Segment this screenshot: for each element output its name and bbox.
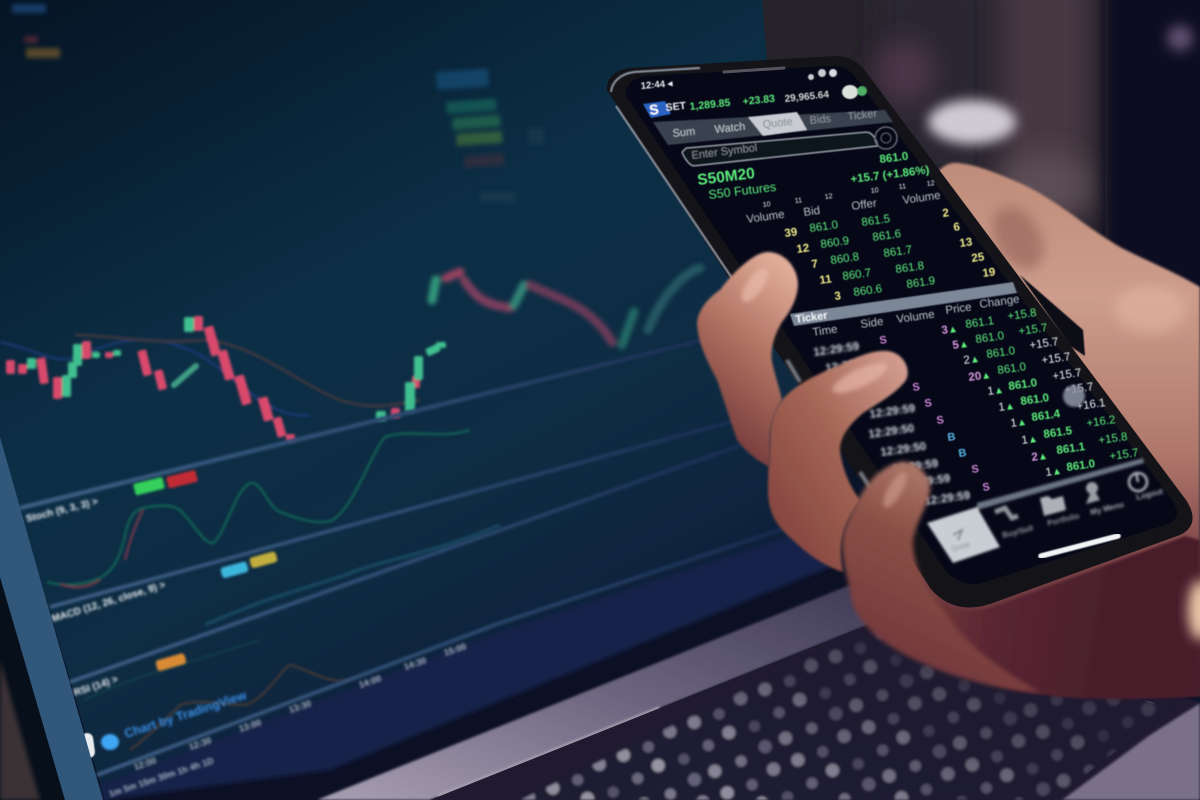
bottom navigation: Portfolio [1046,511,1080,528]
monitor left bezel strip [0,437,103,800]
hinge strip [317,585,885,800]
ticker side markers: S [879,334,888,347]
ticker header strip: Volume [896,309,935,326]
gap between phone and palm [1020,275,1085,356]
ticker rows: 861.5 [1043,425,1074,441]
time axis labels: 12:00 [133,755,158,772]
bright palm edge at right [1188,580,1200,640]
ticker header strip: Change [979,293,1020,311]
ticker rows: 1▲ [1021,433,1039,447]
tab bar: Sum [672,126,696,140]
ticker rows: 861.0 [997,361,1027,377]
order book table: 860.9 [820,235,850,251]
time axis labels: 13:30 [288,698,313,715]
phone side buttons [787,360,878,500]
quote header: 12 [824,193,833,201]
ticker rows: 861.0 [975,330,1005,346]
ticker side markers [879,334,991,494]
ticker rows: +16.1 [1076,397,1106,413]
time axis labels: 13:00 [238,717,263,734]
thumb crease and shading [982,198,1186,563]
time axis labels: 15:00 [443,641,468,658]
ticker rows: +15.7 [1041,351,1071,367]
ticker rows: 861.0 [986,345,1016,361]
candlestick chart far right, out of focus [432,268,700,345]
index ticker bar: SET [665,100,687,114]
bottom navigation: Quote [951,542,971,553]
fingertip highlights [737,264,911,511]
finger: lower [842,462,1040,692]
order book table: 860.8 [830,251,860,267]
order book table: 861.5 [861,213,891,229]
palm rest [1062,703,1200,800]
time axis labels: 1m 5m 15m 30m 1h 4h 1D [108,755,215,799]
ticker rows: +16.2 [1086,414,1116,430]
speaker notch [724,68,784,72]
ticker rows: +15.7 [1052,367,1082,383]
order book table: 12 [796,242,810,256]
ticker header strip: Ticker [795,310,829,326]
ticker rows: 861.1 [1056,441,1087,457]
tab bar: Quote [762,116,793,131]
quote header [696,151,935,209]
ticker times: 12:29:59 [813,341,860,359]
quote header: S50M20 [696,165,756,189]
thumb, palm and wrist behind the phone [900,163,1200,697]
ticker rows: 861.1 [965,315,995,331]
index ticker bar: 1,289.85 [689,97,731,113]
bottom navigation: Logout [1135,487,1164,502]
smartphone [607,56,1193,607]
order book table: 3 [834,290,842,303]
ticker rows: +15.7 [1029,336,1059,352]
order book table: 861.7 [883,244,913,260]
order book table: 861.0 [809,219,839,235]
tab bar: Bids [809,113,832,127]
ticker rows: 5▲ [952,338,970,352]
bottom navigation: My Menu [1089,500,1125,517]
order book table: 13 [959,236,973,250]
tab bar [653,108,893,145]
order book table: Bid [803,205,821,219]
order book table: Offer [851,198,878,213]
ticker times: 12:29:59 [892,458,939,476]
candles group 1 [6,316,420,442]
moving average lines [0,335,420,415]
skin below phone [925,536,1200,699]
tab bar: Watch [714,121,746,136]
order book table: 860.7 [842,267,872,283]
time axis labels: 14:00 [358,673,383,690]
ticker side markers: B [947,431,956,444]
chart labels and pills [25,470,278,750]
ticker rows: 1▲ [998,400,1016,414]
symbol search field [682,127,897,166]
ticker side markers: S [898,366,907,379]
finger: index [697,252,798,467]
status bar: 12:44 ◂ [640,78,674,92]
chart labels and pills: RSI (14) > [73,674,120,699]
ticker times: 12:29:50 [880,441,927,459]
chart labels and pills: MACD (12, 26, close, 9) > [51,580,167,625]
ticker rows: 861.4 [1031,408,1062,424]
ticker rows: 861.0 [1008,377,1038,393]
index ticker bar: S [648,101,660,118]
time axis labels: 14:30 [403,655,428,672]
order book table: 2 [942,207,950,220]
ticker rows: 1▲ [1010,416,1028,430]
quote header: 10 [870,187,879,195]
pane divider lines [20,336,810,775]
ticker side markers: S [924,397,933,410]
ticker rows [941,307,1139,479]
quote header: 12 [926,180,935,188]
order book table: 861.8 [895,260,925,276]
ticker header strip: Side [860,316,884,331]
tab bar: Ticker [847,108,878,123]
order book table: 19 [982,266,996,280]
ticker side markers: S [982,481,991,494]
ticker rows: 3▲ [941,323,959,337]
index ticker bar: +23.83 [742,93,776,108]
ticker rows: 1▲ [987,384,1005,398]
ticker side markers: S [912,381,921,394]
ticker times: 12:29:59 [825,357,872,375]
ticker rows: 2▲ [963,353,981,367]
white scrollbar pill [80,732,96,759]
ticker rows: +15.7 [1109,447,1139,463]
stochastic indicator curve [47,430,500,750]
bottom navigation: Buy/Sell [1001,524,1034,540]
bottom navigation [927,458,1164,563]
order book table: 7 [811,258,819,271]
order book table: 39 [784,226,798,240]
symbol search field: Enter Symbol [691,142,758,162]
quote header: 10 [762,201,771,209]
ticker rows: 1▲ [1045,465,1063,479]
phone edge highlight [611,68,740,290]
finger: middle [768,351,908,572]
ticker side markers: B [958,447,967,460]
order book table: 25 [971,251,986,265]
order book table: 860.6 [853,283,883,299]
ticker header strip [790,282,1020,339]
keyboard [430,618,1200,800]
ticker rows: +15.8 [1007,307,1037,323]
ticker side markers: S [936,414,945,427]
lower time-axis band [100,525,835,800]
order book table: 6 [953,221,961,234]
quote header: 861.0 [879,151,909,166]
ticker rows: +15.7 [1018,322,1048,338]
chart labels and pills: Chart by TradingView [123,688,249,741]
ticker header strip: Price [945,301,972,317]
ticker rows: 2▲ [1031,450,1049,464]
ticker rows: +15.7 [1064,381,1094,397]
candlestick chart on laptop [0,316,446,442]
index ticker bar [643,85,867,118]
quote header: 11 [898,183,907,191]
ticker rows: 20▲ [968,369,992,384]
phone body [607,56,1193,607]
ticker rows: 861.0 [1020,392,1050,408]
ticker header strip: Time [812,324,838,339]
ticker times: 12:29:59 [869,403,916,421]
time axis labels: 12:30 [188,735,213,752]
home indicator [1041,536,1118,556]
quote header: S50 Futures [708,180,777,202]
quote header: 11 [794,197,803,205]
phone screen [626,66,1177,584]
chart labels and pills: Stoch (9, 3, 3) > [25,496,99,525]
touch indicator [1063,385,1085,407]
index ticker bar: 29,965.64 [784,89,830,105]
time axis labels [108,641,468,799]
order book table: 11 [819,273,833,287]
quote header: +15.7 (+1.86%) [850,164,930,186]
laptop screen [0,0,835,800]
ticker times: 12:29:50 [868,423,915,441]
ticker rows: +15.8 [1098,431,1128,447]
ticker times [813,341,971,508]
blurred room background [740,0,1200,340]
order book table: 861.6 [872,228,902,244]
order book table [746,190,996,303]
order book table: Volume [902,190,941,207]
ticker times: 12:29:59 [924,490,971,508]
ticker rows: 861.0 [1066,458,1096,474]
laptop screen far top legend blurs [12,4,544,202]
status bar [640,69,837,92]
order book table: 861.9 [906,275,936,291]
ticker times: 12:29:59 [904,473,951,491]
ticker side markers: S [971,463,980,476]
order book table: Volume [746,209,785,226]
